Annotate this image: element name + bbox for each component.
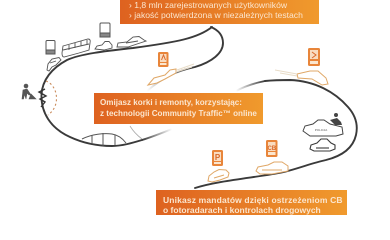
icon: orange device with CB: CB [267, 146, 277, 152]
icon: sedan [117, 36, 146, 47]
callout: traffic: Omijasz korki i remonty, korzystając: [100, 98, 242, 107]
icon: orange car [208, 170, 229, 182]
icon: orange device with arrow [308, 48, 320, 66]
callout: speed cameras: o fotoradarach i kontrolach drogowych [163, 205, 321, 215]
callout: speed cameras: Unikasz mandatów dzięki ostrzeżeniom CB [163, 195, 343, 205]
icon: orange device with CB [266, 140, 278, 157]
callout: top features: › jakość potwierdzona w niezależnych testach [129, 10, 303, 20]
icon: orange sedan [256, 162, 288, 174]
road branch [130, 126, 142, 139]
icon: orange navigation device with roadworks [158, 52, 168, 67]
callout: traffic [94, 93, 263, 124]
icon: bridge [82, 133, 126, 146]
icon: navigation device [46, 40, 55, 54]
icon: navigation device [100, 23, 110, 37]
callout: top features [120, 0, 319, 24]
callout: top features: › 1,8 mln zarejestrowanych użytkowników [129, 0, 287, 10]
icon: dark car [310, 139, 335, 151]
icon: orange device with P: P [215, 153, 221, 162]
icon: road worker [22, 84, 36, 99]
icon: road cracks [39, 89, 46, 107]
icon: police car and officer [303, 113, 343, 136]
icon: small car [95, 42, 112, 50]
icon: orange car with speed lines [148, 64, 194, 85]
detour: dashed orange arc [46, 81, 57, 115]
callout: speed cameras [156, 190, 347, 216]
icon: orange device with P [212, 150, 223, 166]
callout: traffic: z technologii Community Traffic™ online [100, 108, 257, 118]
icon: small car [47, 58, 61, 71]
icon: orange car with motion lines [275, 70, 328, 85]
road: upper section [41, 27, 223, 146]
icon: bus [62, 39, 90, 57]
road: lower section [195, 80, 357, 188]
icon: police car and officer: POLICJA [315, 128, 327, 132]
